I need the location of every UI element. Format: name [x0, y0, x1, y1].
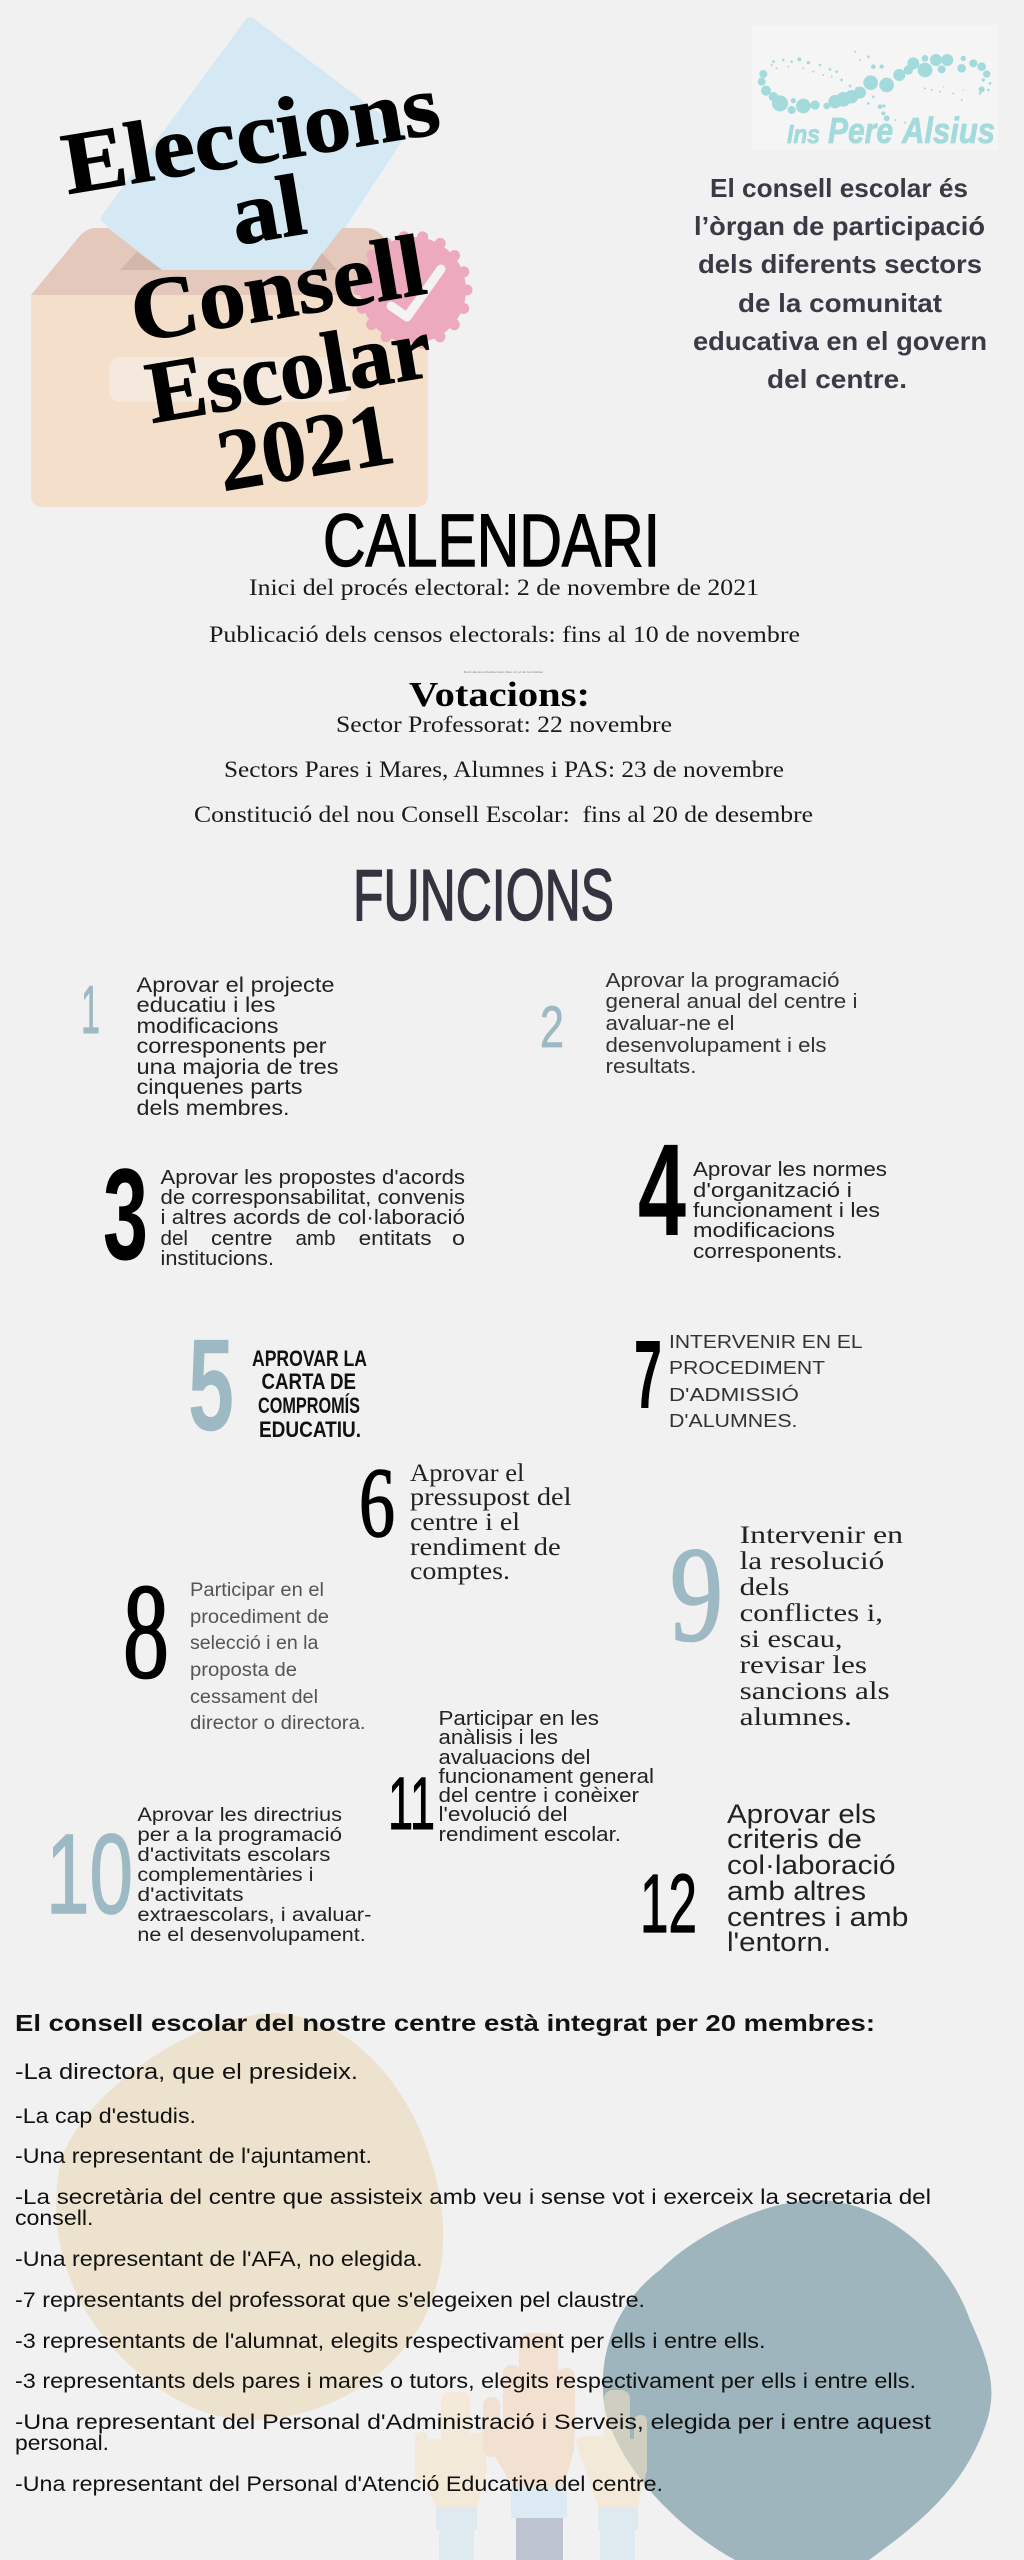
heading: funcions: FUNCIONS — [353, 856, 614, 936]
function 3: del — [160, 1228, 188, 1250]
function 11: l'evolució del — [438, 1804, 568, 1826]
logo: Ins Pere Alsius: Alsius — [901, 110, 995, 151]
function 5: 5 — [188, 1311, 234, 1458]
members list: -3 representants de l'alumnat, elegits respectivament per ells i entre ells. — [15, 2330, 766, 2353]
function 3: amb — [296, 1228, 336, 1250]
function 6: comptes. — [410, 1558, 510, 1585]
members section — [15, 2010, 931, 2496]
function 10: Aprovar les directrius — [137, 1804, 342, 1826]
right hand — [575, 2390, 647, 2560]
function 12: centres i amb — [727, 1902, 908, 1932]
function 4: 4 — [638, 1116, 686, 1263]
title — [56, 57, 446, 511]
calendar dates — [194, 575, 813, 827]
title: 2021 — [210, 386, 401, 511]
function 1: 1 — [81, 972, 100, 1048]
function 2: avaluar-ne el — [606, 1012, 734, 1035]
function 2: general anual del centre i — [606, 990, 858, 1013]
members list: -7 representants del professorat que s'elegeixen pel claustre. — [15, 2289, 645, 2312]
function 1: educatiu i les — [136, 993, 276, 1017]
function 8: Participar en el — [190, 1580, 324, 1601]
calendar dates: Sector Professorat: 22 novembre — [336, 712, 672, 737]
intro paragraph: educativa en el govern — [693, 326, 987, 356]
function 8: procediment de — [190, 1607, 329, 1628]
function 12: l'entorn. — [727, 1927, 831, 1957]
function 3: Aprovar les propostes d'acords — [160, 1167, 465, 1189]
intro paragraph: de la comunitat — [738, 288, 942, 318]
function 11: avaluacions del — [438, 1747, 590, 1769]
calendar dates: Sectors Pares i Mares, Alumnes i PAS: 23 de novembre — [224, 757, 784, 782]
function 3: institucions. — [160, 1248, 274, 1270]
function 10 — [46, 1804, 372, 1946]
members list: -Una representant del Personal d'Administració i Serveis, elegida per i entre aquest — [15, 2411, 931, 2434]
function 6: centre i el — [410, 1509, 520, 1536]
function 4: corresponents. — [693, 1241, 842, 1263]
members list — [15, 2059, 931, 2496]
function 9: dels — [740, 1574, 789, 1601]
function 10: d'activitats escolars — [137, 1844, 331, 1866]
function 5: EDUCATIU. — [259, 1417, 361, 1442]
function 12: col·laboració — [727, 1850, 896, 1880]
intro paragraph: l’òrgan de participació — [694, 211, 985, 241]
function 12: 12 — [640, 1857, 697, 1950]
members list: -Una representant del Personal d'Atenció Educativa del centre. — [15, 2473, 663, 2496]
members list: -La directora, que el presideix. — [15, 2059, 358, 2084]
left hand — [415, 2392, 487, 2560]
function 4 — [638, 1116, 887, 1263]
background blob: yellow — [56, 2013, 443, 2420]
logo: Ins Pere Alsius — [752, 25, 998, 151]
function 11 — [388, 1708, 654, 1846]
function 10: complementàries i — [137, 1864, 314, 1886]
function 9: Intervenir en — [740, 1522, 904, 1549]
intro paragraph: dels diferents sectors — [698, 249, 982, 279]
function 7 — [634, 1320, 863, 1431]
function 3: 3 — [103, 1141, 148, 1287]
function 8: director o directora. — [190, 1713, 366, 1734]
function 8: selecció i en la — [190, 1633, 319, 1654]
function 2: Aprovar la programació — [606, 969, 840, 992]
function 10: ne el desenvolupament. — [137, 1924, 366, 1946]
function 7: PROCEDIMENT — [669, 1357, 825, 1378]
function 11: 11 — [388, 1762, 435, 1845]
members list: personal. — [15, 2432, 109, 2455]
function 11: Participar en les — [438, 1708, 599, 1730]
function 5: CARTA DE — [262, 1369, 356, 1394]
function 7: D'ADMISSIÓ — [669, 1384, 799, 1405]
members heading: El consell escolar del nostre centre està integrat per 20 membres: — [15, 2010, 875, 2036]
calendar dates: Votacions: — [409, 675, 590, 714]
function 4: d'organització i — [693, 1180, 852, 1202]
title: Escolar — [139, 300, 438, 443]
function 8: 8 — [123, 1557, 169, 1707]
function 6: Aprovar el — [410, 1460, 524, 1487]
function 9: revisar les — [740, 1652, 867, 1679]
function 6: 6 — [359, 1447, 395, 1558]
function 2: desenvolupament i els — [606, 1034, 826, 1057]
members list: -3 representants dels pares i mares o tutors, elegits respectivament per ells i entre ells. — [15, 2370, 916, 2393]
function 2 — [540, 969, 858, 1078]
function 12 — [640, 1799, 908, 1957]
background blob: teal — [603, 2200, 991, 2560]
icon: check badge — [359, 236, 467, 344]
function 5: COMPROMÍS — [258, 1393, 360, 1418]
function 12: criteris de — [727, 1824, 862, 1854]
function 3: centre — [211, 1228, 272, 1250]
function 11: rendiment escolar. — [438, 1824, 621, 1846]
calendar dates: Publicació dels censos electorals: fins al 10 de novembre — [209, 622, 800, 647]
function 6 — [359, 1447, 572, 1585]
function 6: pressupost del — [410, 1484, 572, 1511]
title: Eleccions — [56, 57, 446, 214]
box slot shadows — [120, 252, 337, 270]
title: al — [223, 157, 312, 265]
function 9 — [670, 1520, 904, 1731]
function 1: dels membres. — [136, 1096, 290, 1120]
function 1 — [81, 972, 338, 1120]
members list: -La cap d'estudis. — [15, 2105, 196, 2128]
function 8 — [123, 1557, 366, 1734]
function 9: si escau, — [740, 1626, 842, 1653]
function 4: Aprovar les normes — [693, 1159, 887, 1181]
calendar dates: Inici del procés electoral: 2 de novembre de 2021 — [249, 575, 759, 600]
function 1: modificacions — [136, 1014, 278, 1038]
function 2: 2 — [540, 995, 564, 1060]
function 11: del centre i conèixer — [438, 1785, 639, 1807]
function 3: o — [452, 1228, 465, 1250]
function 12: Aprovar els — [727, 1799, 876, 1829]
intro paragraph — [693, 173, 987, 394]
function 3: entitats — [359, 1228, 432, 1250]
function 6: rendiment de — [410, 1534, 561, 1561]
members list: -Una representant de l'AFA, no elegida. — [15, 2248, 423, 2271]
calendar dates: Constitució del nou Consell Escolar: fins al 20 de desembre — [194, 802, 813, 827]
illustration: raised hands — [415, 2333, 647, 2560]
members list: -La secretària del centre que assisteix amb veu i sense vot i exerceix la secretaria del — [15, 2186, 931, 2209]
function 2: resultats. — [606, 1055, 696, 1078]
function 3 — [103, 1141, 465, 1287]
function 4: funcionament i les — [693, 1200, 880, 1222]
function 11: funcionament general — [438, 1766, 654, 1788]
function 9: alumnes. — [740, 1704, 852, 1731]
function 10: d'activitats — [137, 1884, 244, 1906]
function 9: la resolució — [740, 1548, 884, 1575]
centre hand — [483, 2333, 575, 2560]
function 7: D'ALUMNES. — [669, 1410, 798, 1431]
function 1: corresponents per — [136, 1034, 326, 1058]
heading: calendari: CALENDARI — [323, 499, 660, 582]
function 10: 10 — [46, 1811, 133, 1937]
members list: -Una representant de l'ajuntament. — [15, 2145, 372, 2168]
function 7: 7 — [634, 1320, 662, 1429]
calendar dates: Període de reclamacions: fins al 12 de novembre — [464, 670, 544, 674]
function 4: modificacions — [693, 1220, 835, 1242]
function 1: Aprovar el projecte — [136, 973, 334, 997]
function 1: cinquenes parts — [136, 1075, 302, 1099]
box body — [31, 295, 428, 507]
function 10: extraescolars, i avaluar- — [137, 1904, 372, 1926]
function 8: proposta de — [190, 1660, 297, 1681]
box lid — [31, 228, 428, 295]
function 3: de corresponsabilitat, convenis — [160, 1187, 465, 1209]
function 5: APROVAR LA — [252, 1346, 367, 1371]
function 10: per a la programació — [137, 1824, 342, 1846]
function 8: cessament del — [190, 1687, 318, 1708]
box label — [109, 357, 350, 402]
intro paragraph: del centre. — [767, 364, 907, 394]
function 5 — [188, 1311, 367, 1458]
illustration: ballot box — [31, 22, 428, 507]
function 1: una majoria de tres — [136, 1055, 338, 1079]
function 12: amb altres — [727, 1876, 866, 1906]
logo: Ins Pere Alsius: Pere — [828, 110, 893, 151]
function 9: sancions als — [740, 1678, 890, 1705]
logo: Ins Pere Alsius: Ins — [787, 119, 820, 149]
function 9: 9 — [670, 1520, 723, 1670]
members list: consell. — [15, 2207, 93, 2230]
function 7: INTERVENIR EN EL — [669, 1331, 863, 1352]
title: Consell — [123, 217, 432, 362]
ballot paper — [106, 22, 400, 272]
intro paragraph: El consell escolar és — [710, 173, 968, 203]
function 9: conflictes i, — [740, 1600, 883, 1627]
function 3: i altres acords de col·laboració — [160, 1207, 465, 1229]
function 11: anàlisis i les — [438, 1727, 558, 1749]
